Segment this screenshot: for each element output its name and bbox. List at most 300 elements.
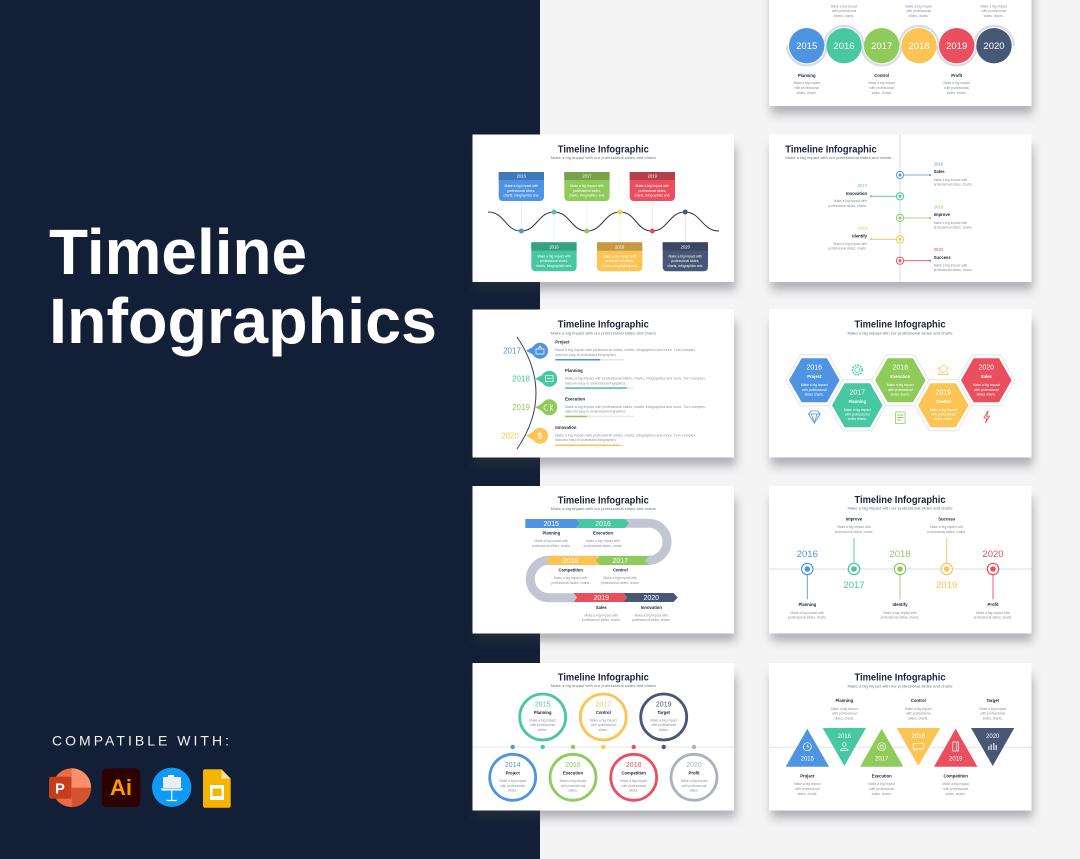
node 2019: 2019 xyxy=(946,41,967,52)
ring 2020: Profit xyxy=(689,770,700,776)
axis xyxy=(769,568,1032,570)
node Identify: Make a big impact with xyxy=(833,242,867,246)
card 2020: 2020 xyxy=(681,244,691,249)
hex 2018: Execution xyxy=(890,374,911,379)
panel: hexagon timeline xyxy=(769,310,1032,458)
triangle 2019 xyxy=(934,729,977,767)
ring 2020: 2020 xyxy=(686,762,702,769)
ring 2015: Planning xyxy=(534,710,552,715)
ring 2016: with professional xyxy=(561,784,586,788)
card 2017 xyxy=(564,172,610,201)
icon: diamond xyxy=(808,411,820,423)
heading: Timeline Infographic xyxy=(785,144,877,156)
pin 2018 Identify: Make a big impact with xyxy=(883,611,917,615)
card 2015: professional slides, xyxy=(507,189,535,193)
pin 2019 Success xyxy=(927,516,966,591)
heading xyxy=(551,496,656,511)
heading: Timeline Infographic xyxy=(854,672,946,684)
ring 2018: Make a big impact xyxy=(620,779,647,783)
pin 2020 xyxy=(501,428,548,444)
hex 2019: with professional xyxy=(931,412,956,416)
text: lower captions: with professional xyxy=(794,86,819,90)
ring 2015: with professional xyxy=(530,723,555,727)
card 2017: charts, infographics and. xyxy=(569,194,605,198)
ring 2016: 2016 xyxy=(565,762,581,769)
heading: Make a big impact with our professional slides and charts xyxy=(551,507,656,511)
arrow 2020: 2020 xyxy=(644,595,659,602)
heading: Make a big impact with our professional slides and charts xyxy=(551,156,656,160)
pin 2020 Profit: professional slides, charts. xyxy=(974,616,1013,620)
captions bottom: with professional xyxy=(869,787,894,791)
captions bottom: slides, charts. xyxy=(797,792,817,796)
icon: PowerPoint xyxy=(49,768,91,807)
captions top: slides, charts. xyxy=(834,716,854,720)
pin 2019 xyxy=(512,399,557,415)
triangle 2018: 2018 xyxy=(912,734,926,740)
node Improve xyxy=(896,204,973,230)
ring 2020: slides. xyxy=(689,789,699,793)
spine xyxy=(899,134,901,282)
node Sales: Make a big impact with xyxy=(934,178,967,182)
hex 2020: Make a big impact xyxy=(973,383,1000,387)
card 2020: professional slides, xyxy=(671,259,699,263)
captions bottom: Make a big impact xyxy=(942,782,969,786)
hex 2018: with professional xyxy=(888,388,913,392)
pin 2017 Improve: 2017 xyxy=(843,580,865,591)
card 2016 xyxy=(531,242,577,271)
captions bottom: Competition xyxy=(943,774,968,778)
card 2015: 2015 xyxy=(517,174,527,179)
captions bottom: slides, charts. xyxy=(946,792,966,796)
heading: Make a big impact with our professional slides and charts xyxy=(551,684,656,688)
pin 2016 Planning: Planning xyxy=(798,602,817,607)
heading: Timeline Infographic xyxy=(558,672,649,684)
labels: Sales xyxy=(596,605,607,610)
labels: professional slides, charts. xyxy=(601,581,640,585)
node Sales: Sales xyxy=(934,169,945,174)
pin 2017 Improve: Improve xyxy=(846,516,863,522)
hex 2017: Planning xyxy=(848,399,867,404)
hex 2019: slides charts. xyxy=(934,417,953,421)
ring 2017: slides. xyxy=(599,728,608,732)
arrow 2018 xyxy=(546,556,600,565)
labels: professional slides, charts. xyxy=(582,618,621,622)
ring 2014: with professional xyxy=(500,784,525,788)
row: Execution: Make a big impact with professional slides, charts, infographics and more. Turn complex xyxy=(565,405,705,409)
row: Innovation: data into easy to understand infographics. xyxy=(555,438,617,442)
captions top: Make a big impact xyxy=(831,707,858,711)
node Improve: 2018 xyxy=(934,204,944,210)
grey road xyxy=(530,523,667,598)
axis xyxy=(472,746,734,748)
node 2020: 2020 xyxy=(983,41,1005,52)
card 2015 xyxy=(499,172,544,201)
row: Execution: Execution xyxy=(565,396,585,402)
row: Planning xyxy=(565,368,705,389)
ring 2018: Competition xyxy=(621,770,646,776)
card 2020: charts, infographics and. xyxy=(667,264,703,268)
row: Project xyxy=(555,340,696,360)
panel: circles timeline (top right) xyxy=(769,0,1032,106)
card 2018: 2018 xyxy=(615,244,625,249)
text: lower captions: slides, charts. xyxy=(947,91,967,95)
node Success: Success xyxy=(934,255,951,260)
text: lower captions: Profit xyxy=(951,73,963,78)
node Innovation: Innovation xyxy=(846,191,867,196)
triangle 2015: 2015 xyxy=(801,756,815,762)
card 2020: Make a big impact with xyxy=(669,254,702,258)
hex 2020: 2020 xyxy=(979,364,994,372)
connectors xyxy=(521,201,685,242)
node Improve: Improve xyxy=(934,212,951,217)
node Sales xyxy=(896,162,973,186)
arrow 2019: 2019 xyxy=(594,595,609,602)
ring 2020: with professional xyxy=(682,784,707,788)
pin 2018: 2018 xyxy=(512,374,530,384)
pin 2019: 2019 xyxy=(512,403,530,412)
node 2015: 2015 xyxy=(796,41,817,52)
triangle 2020 xyxy=(971,728,1014,766)
node Improve: professional slides, charts. xyxy=(934,226,973,230)
pin 2020 Profit xyxy=(974,549,1013,620)
node Identify: 2019 xyxy=(858,226,868,231)
arrow 2015: 2015 xyxy=(544,521,559,528)
triangle 2016: 2016 xyxy=(838,734,852,740)
labels: Make a big impact with xyxy=(535,539,568,543)
card 2016: Make a big impact with xyxy=(537,254,571,258)
node Success xyxy=(896,247,973,272)
ring 2018 xyxy=(611,754,657,800)
pin 2019 Success: Make a big impact with xyxy=(930,525,964,529)
icon: bolt xyxy=(984,412,990,423)
ring 2019: with professional xyxy=(651,723,676,727)
pin 2020 Profit: Profit xyxy=(988,602,999,607)
card 2019: 2019 xyxy=(648,174,658,179)
labels: Competition xyxy=(558,568,583,572)
heading: Timeline Infographic xyxy=(854,320,946,330)
hex 2018: 2018 xyxy=(893,364,908,372)
captions top: slides, charts. xyxy=(983,716,1003,720)
captions bottom: slides, charts. xyxy=(872,792,892,796)
node Identify: Identify xyxy=(852,234,868,238)
hex 2016: Project xyxy=(807,374,822,379)
row: Project: Project xyxy=(555,340,570,344)
text: lower captions xyxy=(793,73,970,95)
ring 2019: Target xyxy=(657,710,671,715)
card 2019: Make a big impact with xyxy=(636,184,669,188)
hex 2018 xyxy=(872,355,929,406)
card 2015: charts, infographics and. xyxy=(503,194,539,198)
row: Project: Make a big impact with professional slides, charts, infographics and more. Turn complex xyxy=(555,348,696,352)
pin 2018 Identify xyxy=(881,549,920,620)
captions bottom xyxy=(794,774,969,796)
text: upper captions xyxy=(831,4,1007,18)
hex 2019 xyxy=(915,380,972,431)
background: navy left panel xyxy=(0,0,540,859)
ring 2016: slides. xyxy=(568,789,578,793)
text: upper captions: with professional xyxy=(906,9,931,13)
node Innovation xyxy=(828,183,904,208)
hex 2018: Make a big impact xyxy=(887,383,914,387)
triangle 2020: 2020 xyxy=(986,734,1000,740)
heading: Make a big impact with our professional slides and charts xyxy=(848,332,953,336)
node 2017: 2017 xyxy=(871,41,892,52)
node Improve: Make a big impact with xyxy=(934,221,967,225)
card 2019: charts, infographics and. xyxy=(634,194,670,198)
ring 2015: 2015 xyxy=(535,701,551,708)
card 2018: charts, infographics and. xyxy=(602,264,638,268)
panel: triangle timeline xyxy=(769,663,1032,810)
labels: professional slides, charts. xyxy=(532,544,571,548)
heading: Timeline Infographics: Infographics xyxy=(49,285,437,357)
card 2017: professional slides, xyxy=(573,189,601,193)
captions bottom: with professional xyxy=(795,787,820,791)
captions bottom: Project xyxy=(800,774,815,778)
hex 2019: Control xyxy=(936,399,951,404)
hex 2017: with professional xyxy=(845,412,870,416)
labels: Make a big impact with xyxy=(604,576,637,580)
text: upper captions: with professional xyxy=(832,9,857,13)
text: upper captions: Make a big impact xyxy=(980,4,1007,8)
hex 2020: slides charts. xyxy=(977,392,996,396)
axis xyxy=(769,746,1032,748)
card 2016: 2016 xyxy=(549,244,559,249)
captions top: Target xyxy=(986,698,1000,703)
pin 2018 xyxy=(512,371,557,387)
text: lower captions: with professional xyxy=(869,86,894,90)
labels: professional slides, charts. xyxy=(584,544,623,548)
hex 2017 xyxy=(829,380,886,431)
ring 2020 xyxy=(671,754,717,800)
icon: Illustrator: Ai xyxy=(110,775,132,800)
heading: Make a big impact with our professional slides and charts xyxy=(848,684,953,688)
node 2018: 2018 xyxy=(908,41,930,52)
pin 2016 Planning: Make a big impact with xyxy=(791,611,824,615)
ring 2019: 2019 xyxy=(656,701,672,708)
arrow 2016: 2016 xyxy=(595,521,611,528)
ring 2016 xyxy=(550,754,596,800)
text: upper captions: Make a big impact xyxy=(831,4,857,8)
ring 2017: with professional xyxy=(591,723,616,727)
card 2016: professional slides, xyxy=(540,259,568,263)
pin 2018 Identify: 2018 xyxy=(889,549,911,560)
row: Planning: data into easy to understand infographics. xyxy=(565,381,626,385)
hex 2016: Make a big impact xyxy=(801,383,828,387)
hex 2020: with professional xyxy=(974,388,999,392)
node 2015 xyxy=(789,28,824,63)
labels: Make a big impact with xyxy=(554,576,588,580)
wave line xyxy=(488,212,719,231)
heading: Timeline Infographics xyxy=(49,216,437,357)
captions top: Planning xyxy=(835,698,854,703)
hex 2016: slides charts. xyxy=(805,392,824,396)
heading xyxy=(551,672,656,688)
ring 2017 xyxy=(580,694,626,740)
card 2018 xyxy=(597,242,642,271)
row: Planning: Planning xyxy=(565,368,583,373)
pin 2020: 2020 xyxy=(501,432,519,440)
triangle 2015 xyxy=(786,729,829,767)
heading: Timeline Infographic xyxy=(854,495,946,506)
heading: Timeline Infographic xyxy=(558,496,649,506)
captions top: with professional xyxy=(832,712,857,716)
card 2019 xyxy=(630,172,675,201)
text: lower captions: slides, charts. xyxy=(797,91,817,95)
captions bottom: Make a big impact xyxy=(794,782,821,786)
text: lower captions: Make a big impact xyxy=(868,81,895,85)
icon: Illustrator xyxy=(102,768,140,807)
arrow 2016 xyxy=(576,519,629,528)
heading xyxy=(551,320,656,336)
panel: curved progress timeline xyxy=(472,310,734,458)
hex 2017: slides charts. xyxy=(848,417,867,421)
labels: Planning xyxy=(542,530,561,536)
pin 2017: 2017 xyxy=(503,346,521,356)
arrow 2020 xyxy=(623,593,678,602)
ring 2018: 2018 xyxy=(626,762,642,769)
labels: Control xyxy=(613,568,628,572)
card 2017: Make a big impact with xyxy=(570,184,604,188)
node Success: 2020 xyxy=(934,247,944,252)
curved line xyxy=(517,337,536,449)
labels: Make a big impact with xyxy=(635,614,668,618)
node Identify: professional slides, charts. xyxy=(828,246,867,250)
panel: snake road timeline xyxy=(472,486,734,634)
panel: wave timeline xyxy=(472,134,734,282)
arrow 2019 xyxy=(574,593,627,602)
icon: Google Slides xyxy=(203,769,231,808)
node Identify xyxy=(828,226,904,250)
node Success: Make a big impact with xyxy=(934,264,967,268)
heading: Timeline Infographic xyxy=(558,144,649,156)
heading xyxy=(848,495,953,510)
node Sales: 2016 xyxy=(934,162,944,166)
hex 2020: Sales xyxy=(981,374,992,379)
ring 2016: Make a big impact xyxy=(560,779,586,783)
card 2018: professional slides, xyxy=(606,259,634,263)
node 2016: 2016 xyxy=(833,41,855,52)
arrow 2018: 2018 xyxy=(563,558,579,565)
ring 2018: slides. xyxy=(629,789,638,793)
ring 2014: Make a big impact xyxy=(499,779,526,783)
text: lower captions: slides, charts. xyxy=(872,91,892,95)
hex 2019: Make a big impact xyxy=(930,408,957,412)
panel: ring timeline xyxy=(472,663,734,810)
labels: Innovation xyxy=(641,605,662,610)
pin 2018 Identify: professional slides, charts. xyxy=(881,616,920,620)
node Innovation: Make a big impact with xyxy=(833,199,867,203)
pin 2017 Improve xyxy=(835,516,874,591)
pin 2016 Planning: professional slides, charts. xyxy=(788,616,827,620)
captions bottom: with professional xyxy=(943,787,968,791)
labels: Execution xyxy=(593,530,613,536)
heading: Timeline Infographics: Timeline xyxy=(49,216,307,288)
ring 2019: Make a big impact xyxy=(650,718,677,722)
arrow 2015 xyxy=(525,519,580,528)
heading: Timeline Infographic xyxy=(558,320,649,330)
text: lower captions: Planning xyxy=(798,73,816,78)
ring 2015 xyxy=(520,694,566,740)
pin 2019 Success: 2019 xyxy=(936,580,957,591)
text: lower captions: Control xyxy=(874,73,889,78)
ring 2014: Project xyxy=(506,770,520,776)
pin 2019 Success: professional slides, charts. xyxy=(927,530,966,534)
captions bottom: Make a big impact xyxy=(868,782,895,786)
ring 2019: slides. xyxy=(659,728,668,732)
icon: badge xyxy=(938,366,949,374)
labels: Make a big impact with xyxy=(585,614,618,618)
text: compatible with: COMPATIBLE WITH: xyxy=(52,732,229,748)
hex 2016: 2016 xyxy=(807,364,822,372)
labels: Make a big impact with xyxy=(586,539,620,543)
text: upper captions: slides, charts. xyxy=(909,14,929,18)
node Innovation: 2017 xyxy=(858,183,868,188)
card 2017: 2017 xyxy=(582,174,592,179)
captions top: Make a big impact xyxy=(905,707,932,711)
icon: Keynote xyxy=(152,768,191,807)
arrow 2017 xyxy=(596,556,649,565)
hex 2019: 2019 xyxy=(936,390,951,396)
row: Innovation: Make a big impact with professional slides, charts, infographics and more. Turn complex xyxy=(555,433,696,437)
card 2019: professional slides, xyxy=(638,189,666,193)
triangle 2016 xyxy=(823,728,866,766)
triangle 2017 xyxy=(860,729,903,767)
ring 2014 xyxy=(490,754,536,800)
text: upper captions: with professional xyxy=(981,9,1006,13)
heading xyxy=(785,144,891,160)
hex 2018: slides charts. xyxy=(891,392,910,396)
captions top: Control xyxy=(911,698,926,703)
heading xyxy=(551,144,656,160)
text: lower captions: with professional xyxy=(944,86,969,90)
pin 2017 Improve: professional slides, charts. xyxy=(835,530,874,534)
labels xyxy=(532,530,671,622)
text: upper captions: slides, charts. xyxy=(984,14,1004,18)
labels: professional slides, charts. xyxy=(551,581,590,585)
row: Planning: Make a big impact with professional slides, charts, infographics and more. Turn complex xyxy=(565,377,705,381)
pin 2020 Profit: Make a big impact with xyxy=(976,611,1010,615)
node 2016 xyxy=(826,28,862,63)
icon: gear xyxy=(852,365,862,375)
pin 2016 Planning xyxy=(788,549,827,620)
pin 2019 Success: Success xyxy=(938,516,956,522)
ring 2019 xyxy=(641,694,687,740)
ring 2014: slides. xyxy=(508,789,517,793)
card 2020 xyxy=(663,242,708,271)
icon: PowerPoint: P xyxy=(55,782,65,798)
hex 2017: 2017 xyxy=(850,390,865,396)
text: upper captions: slides, charts. xyxy=(834,14,854,18)
node Innovation: professional slides, charts. xyxy=(828,204,867,208)
card 2016: charts, infographics and. xyxy=(536,264,572,268)
text: lower captions: Make a big impact xyxy=(793,81,820,85)
hex 2016: with professional xyxy=(802,388,827,392)
ring 2017: 2017 xyxy=(596,701,611,708)
icon: clipboard xyxy=(896,412,905,424)
heading: Make a big impact with our professional slides and charts xyxy=(848,506,953,510)
panel: vertical timeline xyxy=(769,134,1032,282)
ring 2014: 2014 xyxy=(505,762,521,769)
row: Project: data into easy to understand infographics. xyxy=(555,353,617,357)
pin 2018 Identify: Identify xyxy=(893,602,908,607)
triangle 2017: 2017 xyxy=(875,756,889,762)
ring 2020: Make a big impact xyxy=(681,779,707,783)
row: Execution: data into easy to understand infographics. xyxy=(565,410,626,414)
node 2020 xyxy=(976,28,1012,63)
captions top xyxy=(831,698,1006,720)
captions top: slides, charts. xyxy=(908,716,928,720)
row: Innovation xyxy=(555,425,696,446)
